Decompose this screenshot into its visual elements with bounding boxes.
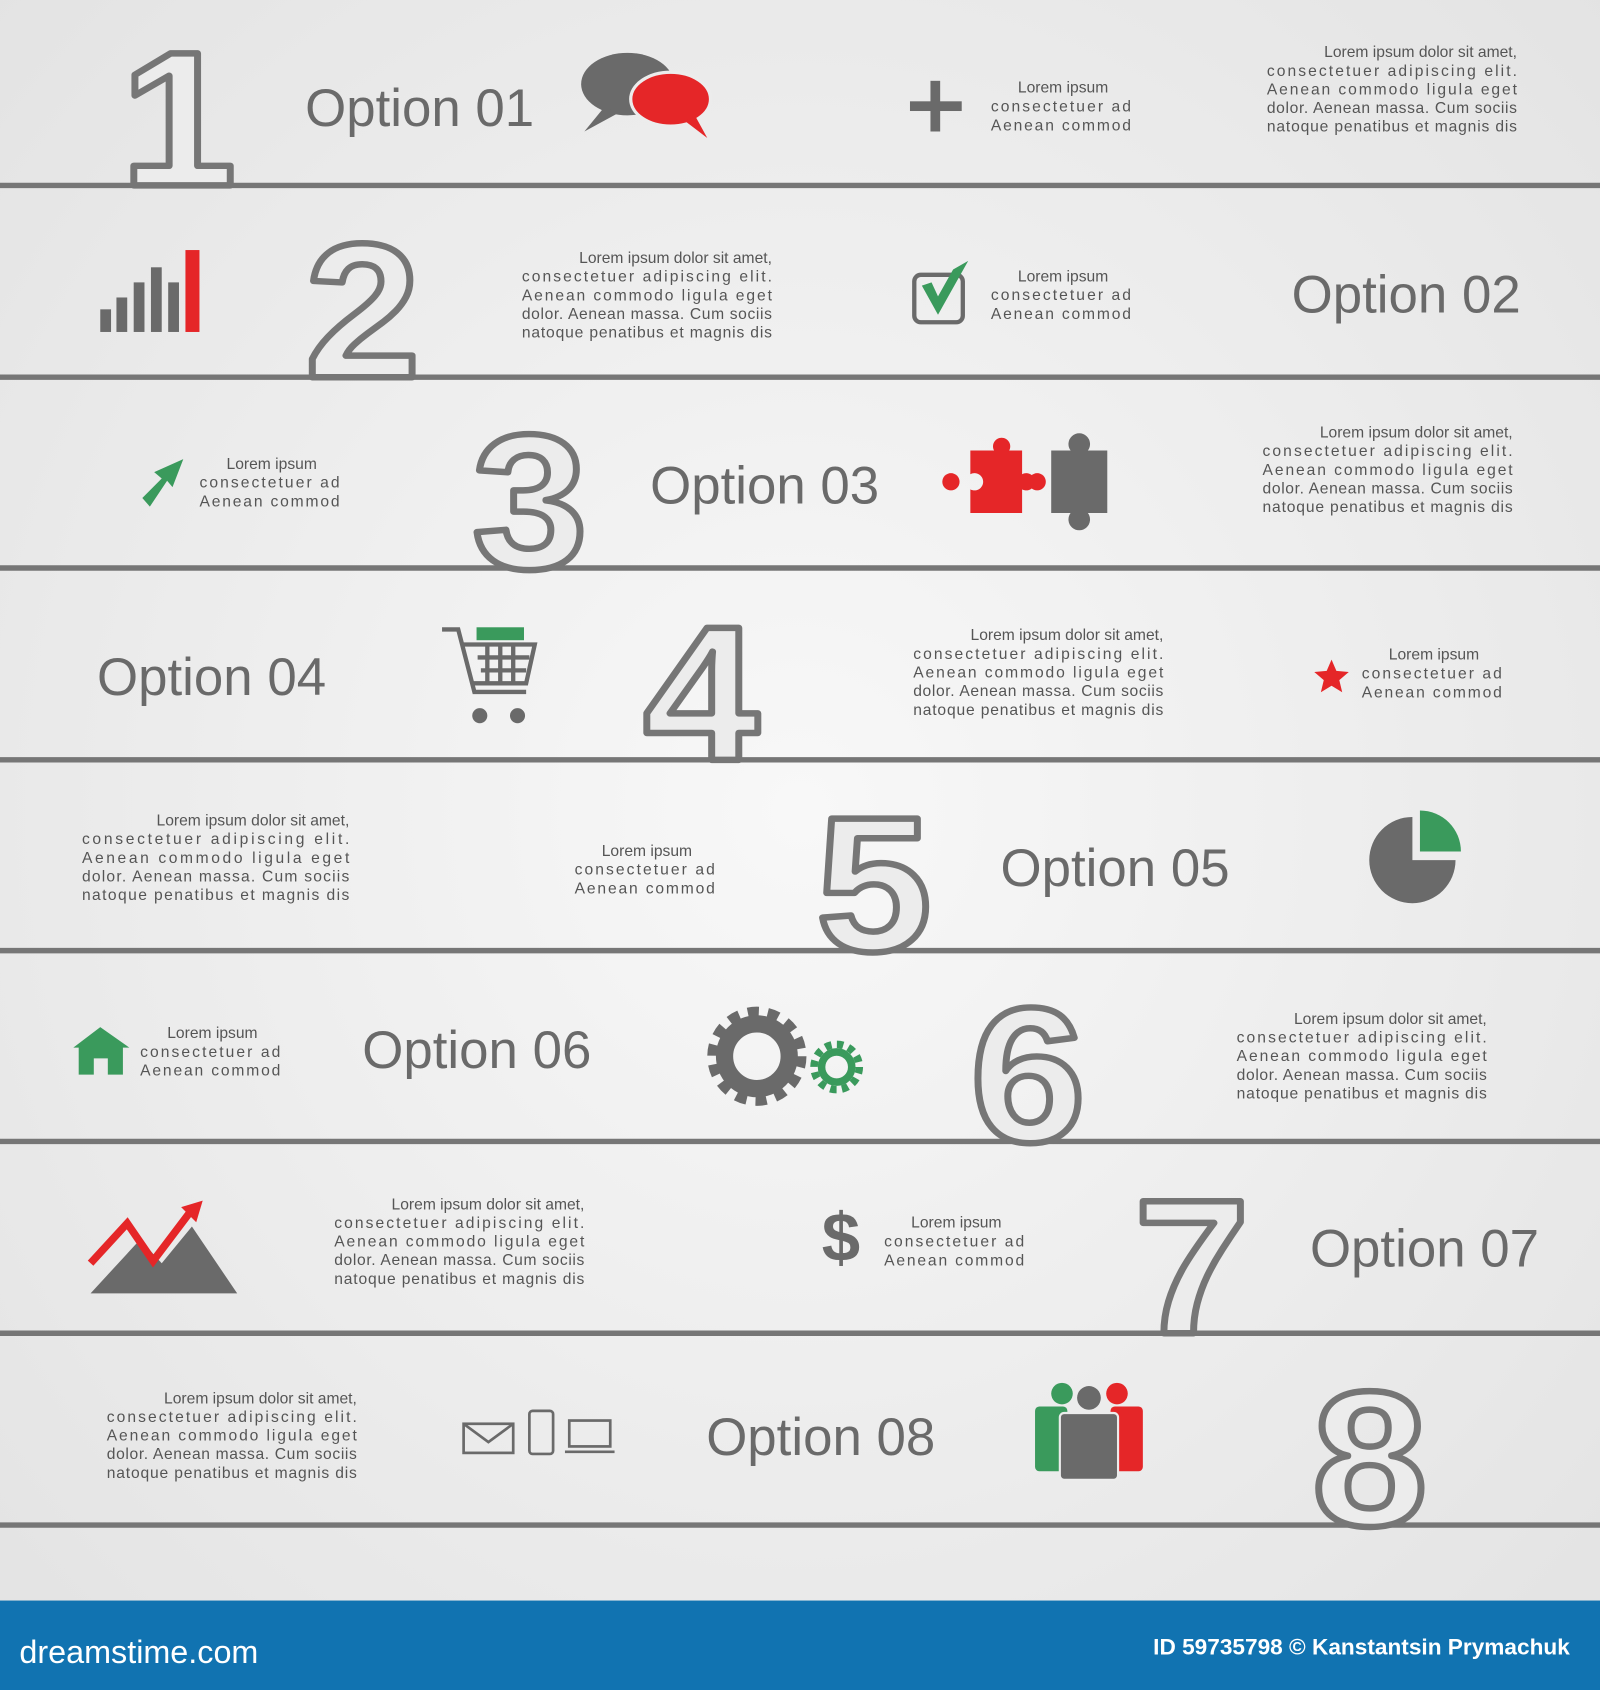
paragraphs: natoque penatibus et magnis dis — [1263, 499, 1513, 516]
small paragraphs: Aenean commod — [575, 881, 715, 898]
paragraphs: dolor. Aenean massa. Cum sociis — [913, 683, 1164, 700]
icon: gears — [714, 1013, 859, 1099]
paragraphs: dolor. Aenean massa. Cum sociis — [1263, 481, 1513, 498]
small paragraphs: Aenean commod — [884, 1252, 1024, 1269]
icon: people — [1035, 1383, 1143, 1480]
numbers: 6 — [970, 968, 1086, 1183]
small paragraphs: consectetuer ad — [575, 862, 715, 879]
icon: devices — [464, 1411, 615, 1454]
icon: puzzle — [942, 433, 1107, 530]
paragraphs: consectetuer adipiscing elit. — [1237, 1030, 1487, 1047]
paragraphs: Aenean commodo ligula eget — [334, 1234, 585, 1251]
option titles: Option 02 — [1292, 266, 1521, 325]
paragraphs: consectetuer adipiscing elit. — [1263, 443, 1513, 460]
option titles: Option 03 — [650, 456, 879, 515]
numbers: 4 — [644, 587, 759, 801]
icon: house — [73, 1027, 129, 1075]
paragraphs: dolor. Aenean massa. Cum sociis — [82, 869, 350, 886]
paragraphs: natoque penatibus et magnis dis — [913, 702, 1164, 719]
small paragraphs: Lorem ipsum — [602, 843, 692, 860]
numbers — [121, 12, 1427, 1566]
small paragraphs: consectetuer ad — [140, 1044, 280, 1061]
paragraphs — [82, 44, 1518, 1482]
paragraphs: dolor. Aenean massa. Cum sociis — [107, 1446, 357, 1463]
numbers: 7 — [1134, 1160, 1249, 1375]
option titles: Option 05 — [1001, 839, 1230, 898]
small paragraphs: consectetuer ad — [884, 1233, 1024, 1250]
paragraphs: Lorem ipsum dolor sit amet, — [579, 250, 772, 267]
paragraphs: natoque penatibus et magnis dis — [107, 1465, 357, 1482]
numbers: 8 — [1312, 1352, 1427, 1566]
icon: speech bubbles — [581, 53, 711, 138]
option titles: Option 07 — [1310, 1219, 1539, 1278]
option titles — [97, 79, 1539, 1467]
paragraphs: Aenean commodo ligula eget — [107, 1428, 358, 1445]
footer: dreamstime.com — [19, 1634, 258, 1670]
paragraphs: dolor. Aenean massa. Cum sociis — [1267, 100, 1517, 117]
paragraphs: dolor. Aenean massa. Cum sociis — [334, 1252, 585, 1269]
paragraphs: Aenean commodo ligula eget — [913, 665, 1164, 682]
footer — [0, 1601, 1600, 1690]
small paragraphs: Aenean commod — [199, 494, 340, 511]
icon: dollar: $ — [822, 1199, 860, 1276]
icon: star — [1314, 660, 1349, 692]
paragraphs: natoque penatibus et magnis dis — [522, 325, 772, 342]
small paragraphs: Aenean commod — [991, 306, 1131, 323]
small paragraphs: Lorem ipsum — [1389, 647, 1479, 664]
paragraphs: consectetuer adipiscing elit. — [1267, 63, 1517, 80]
paragraphs: natoque penatibus et magnis dis — [82, 887, 350, 904]
option titles: Option 06 — [362, 1021, 591, 1080]
paragraphs: Lorem ipsum dolor sit amet, — [1320, 425, 1513, 442]
small paragraphs: consectetuer ad — [1362, 665, 1502, 682]
paragraphs: dolor. Aenean massa. Cum sociis — [522, 306, 772, 323]
numbers: 5 — [816, 778, 931, 992]
small paragraphs: consectetuer ad — [991, 99, 1131, 116]
paragraphs: consectetuer adipiscing elit. — [82, 831, 349, 848]
numbers: 2 — [305, 204, 420, 419]
footer: ID 59735798 © Kanstantsin Prymachuk — [1153, 1634, 1570, 1659]
option titles: Option 08 — [706, 1408, 935, 1467]
small paragraphs: Lorem ipsum — [227, 456, 317, 473]
paragraphs: Aenean commodo ligula eget — [1237, 1048, 1487, 1065]
paragraphs: dolor. Aenean massa. Cum sociis — [1237, 1067, 1487, 1084]
numbers: 3 — [472, 395, 588, 609]
paragraphs: consectetuer adipiscing elit. — [913, 646, 1163, 663]
small paragraphs: Lorem ipsum — [1018, 268, 1108, 285]
numbers: 1 — [121, 12, 236, 227]
small paragraphs: Aenean commod — [991, 117, 1131, 134]
paragraphs: Aenean commodo ligula eget — [522, 287, 773, 304]
paragraphs: Lorem ipsum dolor sit amet, — [1324, 44, 1517, 61]
small paragraphs: consectetuer ad — [991, 287, 1131, 304]
icon: green arrow — [142, 459, 183, 507]
icon: cart — [442, 627, 535, 721]
paragraphs: natoque penatibus et magnis dis — [1267, 119, 1517, 136]
small paragraphs: Lorem ipsum — [1018, 80, 1108, 97]
paragraphs: Lorem ipsum dolor sit amet, — [157, 813, 349, 830]
icon: mountain chart — [91, 1201, 237, 1293]
paragraphs: natoque penatibus et magnis dis — [1237, 1086, 1487, 1102]
icon: pie — [1369, 811, 1461, 903]
icon: plus — [910, 81, 962, 131]
option titles: Option 04 — [97, 648, 326, 707]
small paragraphs: Lorem ipsum — [167, 1025, 258, 1042]
paragraphs: natoque penatibus et magnis dis — [334, 1271, 585, 1288]
paragraphs: Lorem ipsum dolor sit amet, — [971, 627, 1163, 644]
paragraphs: Aenean commodo ligula eget — [1267, 81, 1518, 98]
paragraphs: Lorem ipsum dolor sit amet, — [164, 1390, 357, 1407]
paragraphs: Aenean commodo ligula eget — [1263, 462, 1513, 479]
paragraphs: consectetuer adipiscing elit. — [522, 269, 772, 286]
small paragraphs: consectetuer ad — [199, 475, 340, 492]
small paragraphs: Lorem ipsum — [911, 1215, 1001, 1232]
small paragraphs — [140, 80, 1502, 1269]
paragraphs: Lorem ipsum dolor sit amet, — [392, 1196, 584, 1213]
paragraphs: consectetuer adipiscing elit. — [334, 1215, 584, 1232]
small paragraphs: Aenean commod — [1362, 684, 1502, 701]
paragraphs: consectetuer adipiscing elit. — [107, 1409, 357, 1426]
icon: checkbox — [914, 261, 968, 322]
small paragraphs: Aenean commod — [140, 1063, 280, 1080]
paragraphs: Aenean commodo ligula eget — [82, 850, 350, 867]
paragraphs: Lorem ipsum dolor sit amet, — [1294, 1011, 1487, 1028]
icon: bar chart — [100, 250, 199, 332]
option titles: Option 01 — [305, 79, 534, 138]
